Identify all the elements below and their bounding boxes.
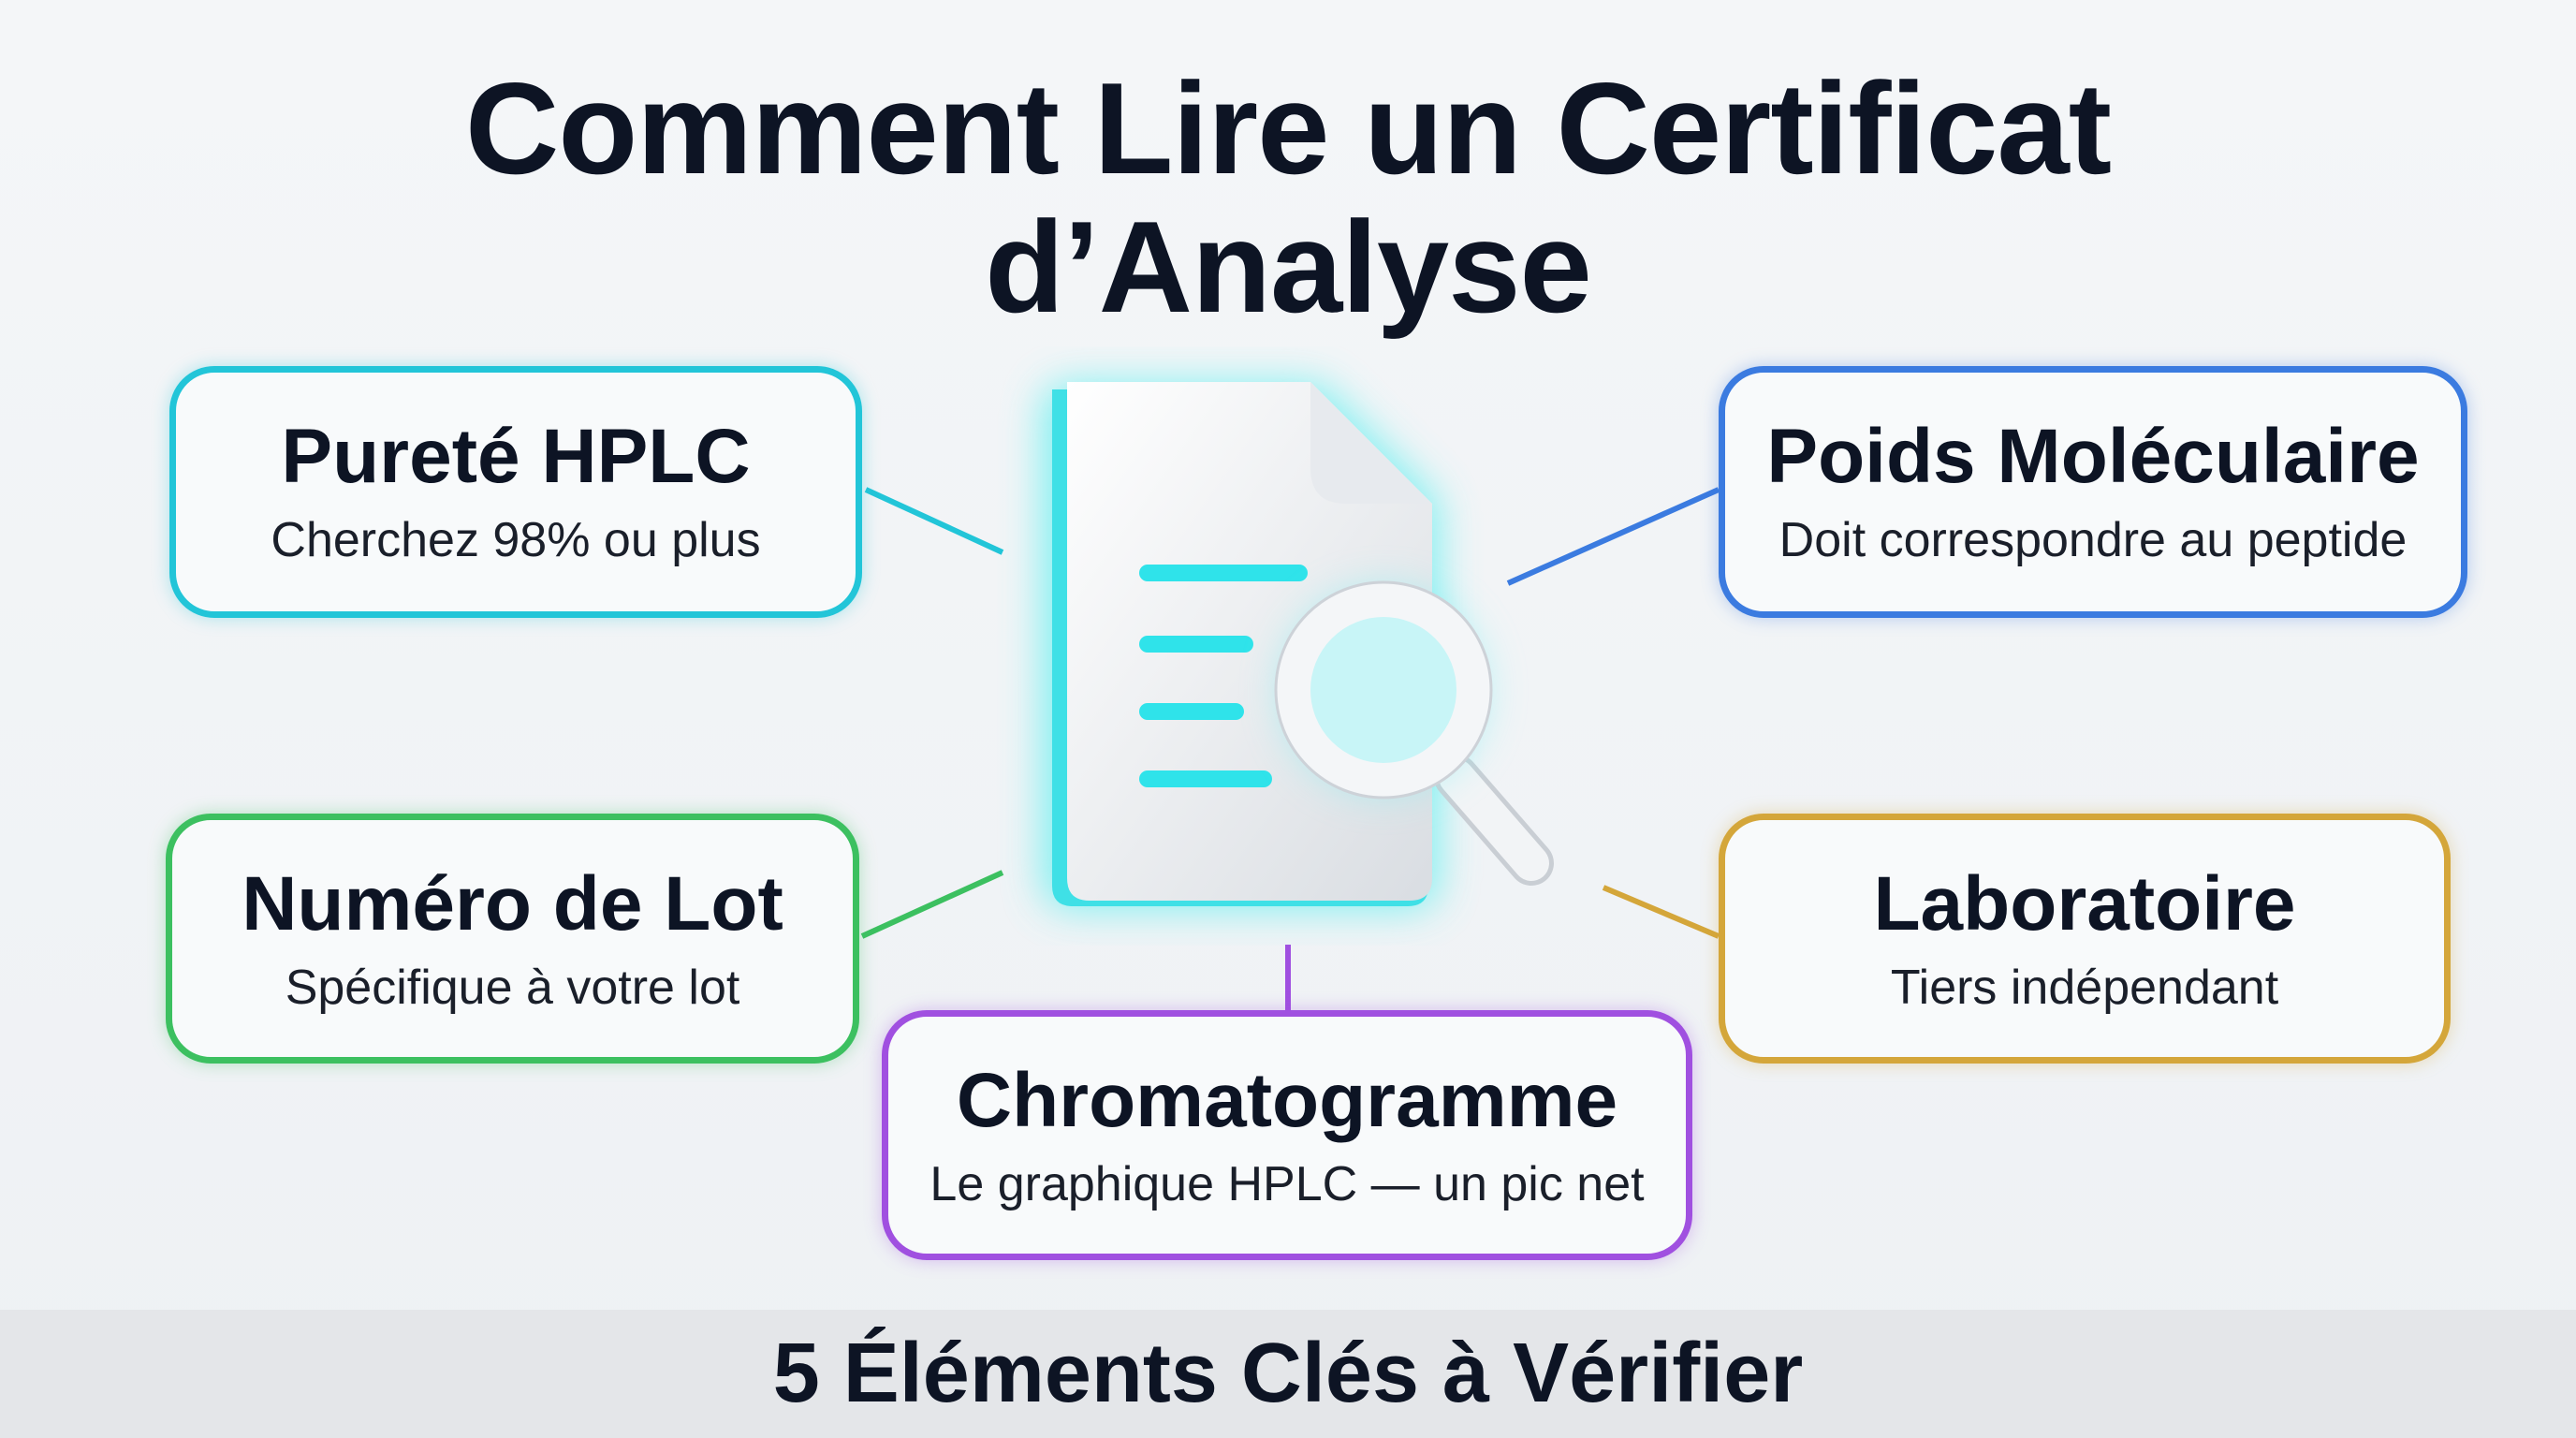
panel: Pureté HPLC: Cherchez 98% ou plus [271, 513, 761, 567]
panel: Poids Moléculaire: Doit correspondre au peptide [1779, 513, 2407, 567]
title [465, 56, 2111, 340]
footer band: 5 Éléments Clés à Vérifier [773, 1327, 1803, 1420]
panel: Laboratoire: Laboratoire [1873, 861, 2296, 946]
panel: Chromatogramme [882, 1010, 1692, 1260]
panel: Poids Moléculaire [1719, 366, 2467, 618]
panel: Laboratoire: Tiers indépendant [1891, 961, 2278, 1015]
panel: Pureté HPLC: Pureté HPLC [281, 414, 751, 499]
title: Comment Lire un Certificat [465, 56, 2111, 201]
panel: Chromatogramme: Le graphique HPLC — un pic net [929, 1157, 1645, 1211]
footer band [0, 1310, 2576, 1438]
panel: Pureté HPLC [169, 366, 862, 618]
title: d’Analyse [985, 195, 1591, 340]
panel: Chromatogramme: Chromatogramme [957, 1058, 1617, 1143]
panel: Numéro de Lot: Numéro de Lot [242, 861, 783, 946]
panel: Laboratoire [1719, 814, 2451, 1064]
panel: Numéro de Lot [166, 814, 859, 1064]
icon: document with magnifier [1014, 355, 1554, 937]
panel: Poids Moléculaire: Poids Moléculaire [1766, 414, 2420, 499]
panel: Numéro de Lot: Spécifique à votre lot [285, 961, 739, 1015]
